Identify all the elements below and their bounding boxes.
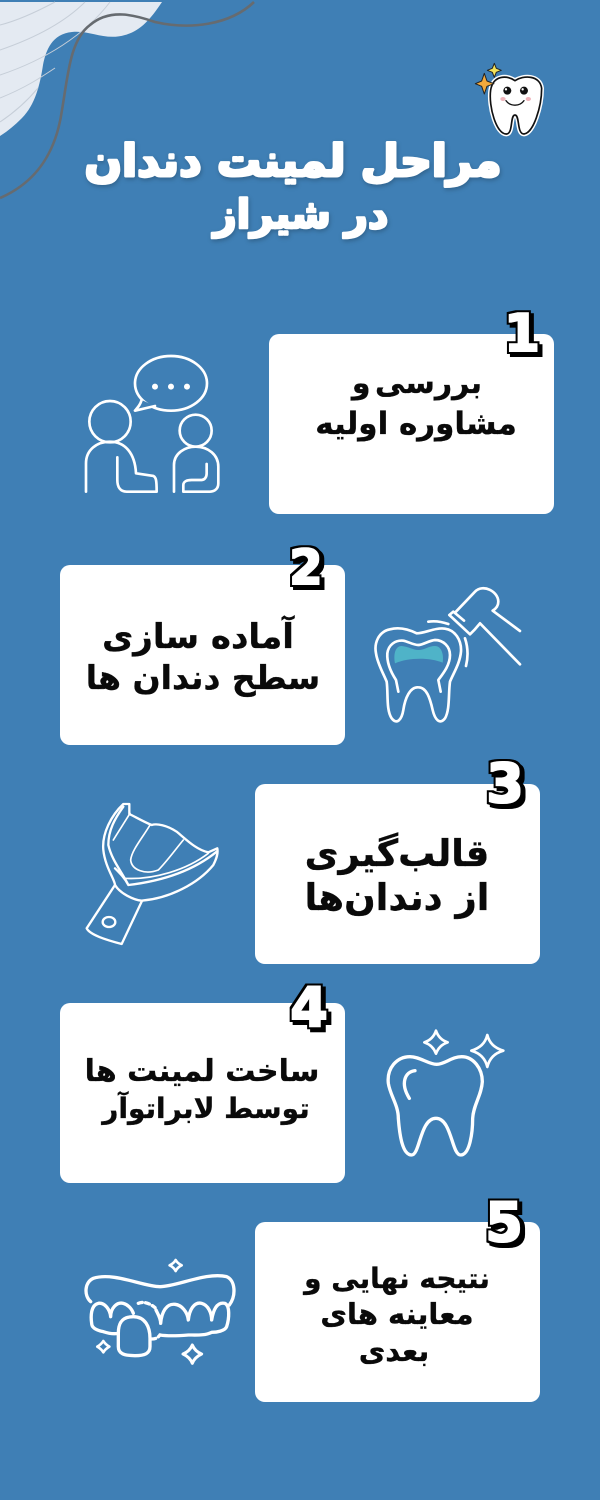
panel: step 1 xyxy=(269,334,554,514)
icon: impression tray xyxy=(87,804,218,944)
number 4: 4 xyxy=(290,976,328,1039)
decorative corner shape xyxy=(0,2,254,198)
panel: step 1: مشاوره اولیه xyxy=(315,406,517,442)
icon: two people talking xyxy=(86,356,218,492)
panel: step 3: قالب‌گیری xyxy=(305,832,489,875)
panel: step 3 xyxy=(255,784,540,964)
panel: step 5 xyxy=(255,1222,540,1402)
title: در شیراز xyxy=(212,192,388,238)
number 5: 5 xyxy=(485,1191,523,1254)
panel: step 5: بعدی xyxy=(359,1334,429,1368)
panel: step 2 xyxy=(60,565,345,745)
panel: step 2: آماده سازی xyxy=(102,615,295,657)
panel: step 4: ساخت لمینت ها xyxy=(85,1054,319,1089)
title: مراحل لمینت دندان xyxy=(84,136,502,187)
panel: step 2: سطح دندان ها xyxy=(86,658,320,698)
number 1: 1 xyxy=(504,304,540,364)
icon: smiling tooth mascot xyxy=(475,63,542,134)
panel: step 1: بررسی و xyxy=(350,366,482,401)
icon: shiny tooth xyxy=(388,1031,503,1155)
icon: veneer and teeth xyxy=(86,1260,234,1363)
number 3: 3 xyxy=(486,752,524,815)
panel: step 4 xyxy=(60,1003,345,1183)
panel: step 5: نتیجه نهایی و xyxy=(302,1262,490,1295)
panel: step 5: معاینه های xyxy=(320,1297,474,1331)
panel: step 4: توسط لابراتوآر xyxy=(100,1091,310,1125)
panel: step 3: از دندان‌ها xyxy=(305,876,489,919)
icon: tooth and dental drill xyxy=(376,588,520,721)
number 2: 2 xyxy=(289,540,323,596)
title xyxy=(84,136,502,238)
